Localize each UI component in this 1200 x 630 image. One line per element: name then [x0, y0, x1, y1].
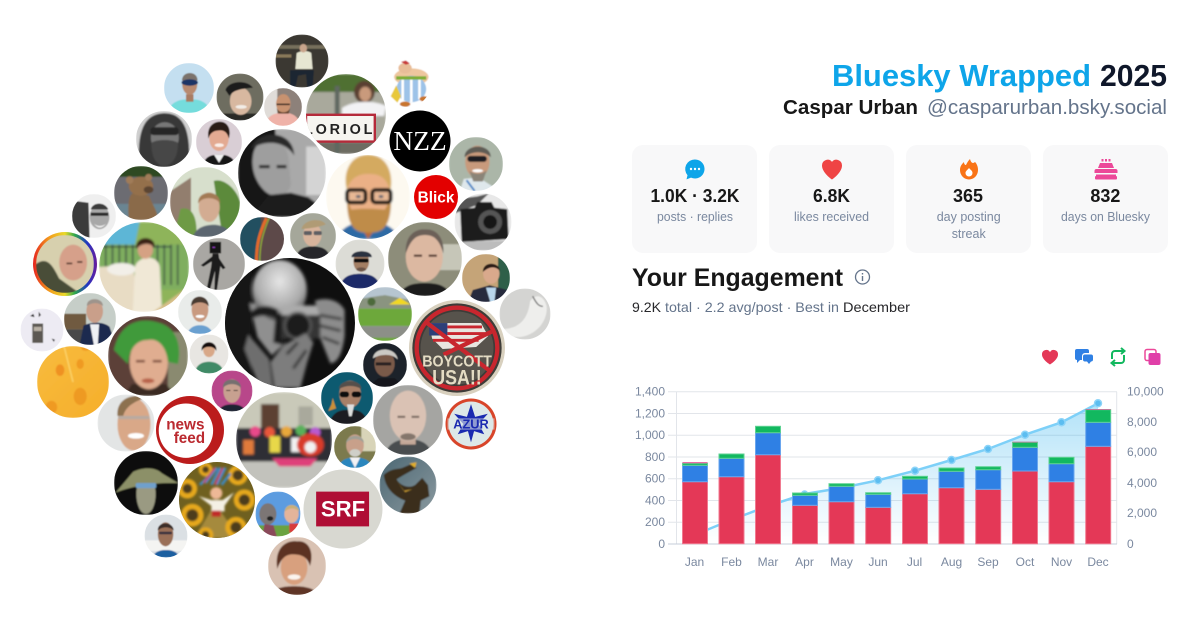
bars: reposts	[682, 410, 1111, 495]
axis labels left: 1,400	[635, 384, 665, 398]
panel: likes received	[769, 145, 894, 253]
avatar: man in green landscape	[170, 167, 240, 237]
avatar: cheese	[37, 345, 109, 418]
avatar: Boycott USA coin	[409, 300, 505, 396]
month labels: Oct	[1016, 555, 1035, 569]
stat label: day posting	[937, 209, 1001, 224]
stat value: 832	[1090, 186, 1120, 206]
avatar: laughing man monochrome	[72, 194, 116, 238]
icon: likes heart	[1042, 350, 1058, 364]
avatar: monochrome portrait of man	[238, 129, 326, 217]
avatar cluster	[20, 34, 550, 595]
month labels: Jul	[907, 555, 922, 569]
avatar: young man with brown hair	[268, 537, 326, 595]
icon: replies bubbles	[1075, 349, 1093, 364]
avatar: Obelix cartoon	[390, 60, 429, 107]
icon: heart	[822, 160, 842, 180]
stat value: 365	[953, 186, 983, 206]
avatar: grey-bearded man in blue jacket	[334, 426, 376, 468]
month labels: Sep	[977, 555, 999, 569]
avatar: man with sunglasses and lanyard	[449, 137, 503, 191]
avatar: woman at lakeside table	[99, 222, 189, 312]
avatar: field with yellow tent	[358, 287, 412, 341]
bars: quotes	[682, 409, 1111, 463]
avatar: woman with green top	[190, 334, 228, 374]
axis labels right: 4,000	[1127, 476, 1157, 490]
avatar: smiling man with rimless glasses	[98, 394, 154, 452]
engagement summary: 9.2K	[632, 299, 662, 315]
bars: replies	[682, 422, 1111, 507]
stacked bar and line chart	[635, 384, 1164, 569]
cumulative area	[694, 403, 1098, 544]
icon: flame	[960, 159, 978, 180]
avatar: man with cap and glasses	[290, 213, 336, 259]
avatar: Blick logo	[414, 175, 458, 219]
stat label: days on Bluesky	[1061, 209, 1150, 224]
axis labels left: 800	[645, 450, 665, 464]
avatar: older man in navy suit	[64, 293, 116, 345]
title: Bluesky Wrapped 2025: 2025	[1100, 58, 1167, 93]
axis labels right: 10,000	[1127, 384, 1164, 398]
avatar: drawing of arm	[500, 288, 550, 340]
avatar: parade crowd	[236, 392, 332, 488]
avatar: blue eye mask man	[164, 63, 214, 113]
cumulative line	[694, 403, 1098, 535]
avatar: NZZ logo	[390, 110, 450, 172]
avatar: woman behind Loriol town sign: LORIOL	[304, 122, 375, 138]
axis labels right	[1127, 384, 1164, 551]
stat label: likes received	[794, 209, 869, 224]
month labels: Aug	[941, 555, 962, 569]
icon: speech bubble	[685, 159, 705, 179]
avatar: person in green conical hat	[114, 451, 178, 515]
avatar: Azur enamel sign	[446, 398, 496, 450]
avatar: sunflowers illustration	[177, 462, 255, 543]
user name and handle: Caspar Urban	[783, 97, 918, 119]
avatar: minecraft enderman figure	[193, 238, 245, 290]
stat value: 6.8K	[813, 186, 850, 206]
panel: posts and replies	[632, 145, 757, 253]
avatar: older man in dark	[363, 343, 407, 387]
axis labels left	[635, 384, 665, 551]
avatar: Blick logo: Blick	[418, 189, 455, 206]
axis labels left: 400	[645, 494, 665, 508]
heading: Your Engagement: Your Engagement	[632, 264, 844, 292]
month labels: Apr	[795, 555, 814, 569]
axis labels left: 600	[645, 472, 665, 486]
avatar: man in flat cap and navy sweater	[336, 240, 384, 288]
month labels: May	[830, 555, 853, 569]
engagement summary: total · 2.2 avg/post · Best in	[665, 299, 839, 315]
avatar: man with blue shirt and glasses	[144, 514, 188, 558]
month labels: Dec	[1087, 555, 1109, 569]
engagement summary: December	[843, 299, 910, 315]
month labels	[685, 555, 1109, 569]
month labels: Jan	[685, 555, 704, 569]
stat value: 1.0K · 3.2K	[650, 186, 740, 206]
avatar: SRF logo	[304, 470, 382, 548]
icon: birthday cake	[1094, 159, 1118, 180]
panel: days on Bluesky	[1043, 145, 1168, 253]
avatar: bald man with rainbow ring	[33, 232, 97, 296]
month labels: Feb	[721, 555, 742, 569]
avatar: golden sculpture	[380, 456, 436, 514]
avatar: birds on tower	[20, 308, 64, 352]
avatar: brown bear	[114, 166, 168, 220]
axis labels left: 200	[645, 515, 665, 529]
axis labels right: 2,000	[1127, 506, 1157, 520]
chart legend	[1042, 348, 1160, 366]
axis labels right: 8,000	[1127, 415, 1157, 429]
avatar: man with green hair	[108, 316, 188, 396]
avatar: man seated in shelves room	[276, 34, 328, 88]
axis labels left: 0	[658, 537, 665, 551]
stat label	[937, 209, 1001, 241]
avatar: NZZ logo: NZZ	[393, 126, 447, 156]
axis labels left: 1,000	[635, 428, 665, 442]
bars: likes	[682, 446, 1111, 544]
icon: info	[856, 270, 870, 284]
title: Bluesky Wrapped 2025: Bluesky Wrapped	[832, 58, 1091, 93]
stat label: streak	[952, 226, 986, 241]
avatar: hooded bearded man in monochrome	[136, 111, 192, 167]
avatar: woman with dog	[256, 492, 300, 536]
avatar: rainbow over water	[240, 217, 285, 261]
avatar: cartoon bearded man with glasses	[326, 155, 410, 239]
avatar: central monochrome photographer with camera	[225, 258, 355, 388]
stat label: posts · replies	[657, 209, 733, 224]
avatar: SRF logo: SRF	[321, 497, 365, 522]
avatar: man with pink shirt	[264, 88, 302, 126]
avatar: news feed logo: news	[166, 416, 204, 433]
axis labels right: 6,000	[1127, 445, 1157, 459]
avatar: Boycott USA coin: USA!!	[432, 366, 482, 389]
month labels: Mar	[758, 555, 778, 569]
icon: quote squares	[1145, 350, 1160, 365]
avatar: Azur enamel sign: AZUR	[453, 417, 489, 432]
avatar: bald man on grey	[373, 385, 443, 455]
panel: day posting streak	[906, 145, 1031, 253]
avatar: smiling man in tuxedo	[196, 119, 242, 165]
axis labels left: 1,200	[635, 406, 665, 420]
month labels: Nov	[1051, 555, 1072, 569]
engagement summary	[632, 299, 910, 315]
user name and handle: @casparurban.bsky.social	[927, 97, 1167, 119]
axis labels right: 0	[1127, 537, 1134, 551]
line points	[802, 400, 1102, 497]
avatar: monochrome camera	[454, 194, 512, 250]
avatar: smiling man blue shirt	[178, 290, 222, 334]
avatar: balding man portrait	[388, 222, 462, 296]
user name and handle	[783, 97, 1167, 119]
grid lines	[668, 392, 1117, 544]
avatar: news feed logo: feed	[174, 430, 205, 447]
avatar: man in suit reading	[462, 254, 510, 302]
avatar: woman behind Loriol town sign	[304, 74, 386, 154]
month labels: Jun	[868, 555, 888, 569]
icon: repost arrows	[1112, 348, 1124, 366]
avatar: Boycott USA coin: BOYCOTT	[422, 354, 492, 371]
avatar: news feed logo	[156, 396, 224, 464]
avatar: man with sunglasses and guitars	[321, 372, 373, 424]
avatar: man in black beret	[216, 74, 264, 120]
avatar: man on magenta background	[212, 370, 252, 412]
